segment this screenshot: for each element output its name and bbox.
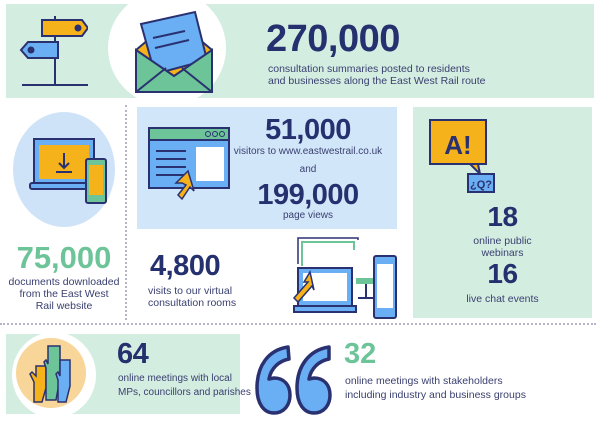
icon: devices bbox=[293, 237, 397, 319]
text: documents: from the East West bbox=[19, 288, 109, 300]
panel: webinars bbox=[413, 107, 592, 318]
text: stakeholders: online meetings with stakeholders bbox=[345, 375, 503, 387]
text: summaries: and businesses along the East West Rail route bbox=[268, 75, 486, 87]
text: MPs: MPs, councillors and parishes bbox=[118, 387, 251, 398]
heading: 75,000: 75,000 bbox=[17, 240, 111, 275]
text: visits: visits to our virtual bbox=[148, 285, 232, 297]
heading: 4,800: 4,800 bbox=[150, 250, 220, 282]
panel: MP meetings bbox=[6, 334, 240, 414]
icon: quote marks bbox=[255, 345, 332, 415]
text: stakeholders bbox=[345, 375, 526, 401]
white circle behind envelope bbox=[108, 0, 226, 106]
text: page views: page views bbox=[283, 210, 333, 221]
icon: signpost bbox=[20, 16, 88, 86]
heading: 199,000: 199,000 bbox=[257, 179, 359, 211]
text: webinars: online public bbox=[473, 235, 532, 247]
icon: envelope bbox=[135, 10, 213, 93]
text: documents: Rail website bbox=[36, 300, 92, 312]
icon: laptop & phone download in circle bbox=[13, 112, 115, 227]
text: documents: documents downloaded bbox=[9, 276, 119, 288]
icon: raised hands bbox=[16, 338, 86, 408]
heading: 32: 32 bbox=[344, 338, 376, 370]
divider bbox=[125, 105, 127, 320]
divider bbox=[0, 323, 596, 325]
text: webinars: webinars bbox=[481, 247, 524, 259]
text: and: and bbox=[300, 164, 316, 175]
heading: 16: 16 bbox=[487, 258, 518, 289]
panel: website bbox=[137, 107, 397, 229]
icon: speech bubbles bbox=[429, 119, 495, 193]
icon: speech bubbles: ¿Q? bbox=[470, 179, 492, 191]
text: webinars bbox=[473, 235, 532, 259]
text: MPs bbox=[118, 373, 251, 398]
text: visitors: visitors to www.eastwestrail.co.uk bbox=[234, 146, 382, 157]
text: visits: consultation rooms bbox=[148, 297, 236, 309]
text: summaries: consultation summaries posted to residents bbox=[268, 63, 470, 75]
icon: browser bbox=[148, 127, 230, 200]
text: summaries bbox=[268, 63, 486, 87]
heading: 270,000: 270,000 bbox=[266, 18, 400, 60]
heading: 51,000: 51,000 bbox=[265, 114, 351, 146]
text: live chat: live chat events bbox=[466, 293, 539, 305]
heading: 18: 18 bbox=[487, 201, 518, 232]
text: documents bbox=[8, 276, 119, 312]
text: stakeholders: including industry and business groups bbox=[345, 389, 526, 401]
text: MPs: online meetings with local bbox=[118, 373, 232, 384]
icon: speech bubbles: A! bbox=[444, 130, 472, 160]
panel: top band bbox=[6, 4, 594, 98]
text: visits bbox=[148, 285, 236, 309]
heading: 64: 64 bbox=[117, 338, 148, 370]
